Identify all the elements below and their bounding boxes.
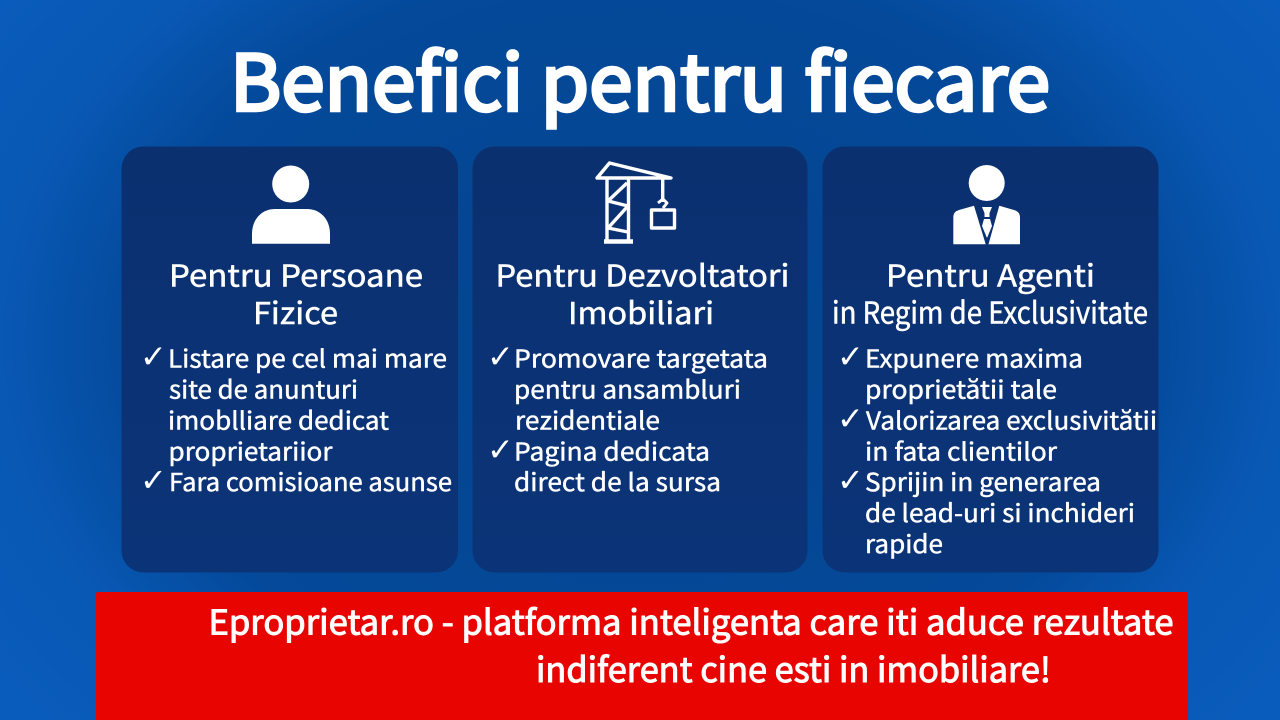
list: site de anunturi	[169, 372, 358, 406]
list: Valorizarea exclusivitătii	[866, 402, 1157, 438]
heading: Pentru Dezvoltatori	[496, 252, 790, 296]
callout text: Eproprietar.ro - platforma inteligenta care iti aduce rezultate	[208, 596, 1174, 644]
icon: agent	[953, 165, 1020, 244]
list: Pagina dedicata	[514, 434, 710, 468]
list: de lead-uri si inchideri	[865, 495, 1135, 530]
list: pentru ansambluri	[514, 372, 741, 406]
list: Expunere maxima	[865, 340, 1083, 376]
callout banner	[96, 592, 1188, 720]
heading: Pentru Agenti	[886, 252, 1095, 296]
list: ✓	[140, 338, 167, 376]
list	[837, 338, 1157, 561]
list: ✓	[487, 430, 514, 468]
list: direct de la sursa	[514, 464, 721, 499]
list: imoblliare dedicat	[168, 402, 389, 438]
list: rezidentiale	[515, 402, 660, 438]
heading: Pentru Persoane	[169, 252, 423, 296]
heading	[496, 252, 790, 333]
heading: Imobiliari	[568, 289, 714, 333]
title: Benefici pentru fiecare	[230, 22, 1050, 134]
list: ✓	[140, 461, 167, 499]
heading: Fizice	[253, 289, 338, 333]
panel: dezvoltatori	[472, 146, 808, 572]
callout text: indiferent cine esti in imobiliare!	[536, 643, 1051, 692]
list: ✓	[487, 338, 514, 376]
icon: person	[252, 166, 330, 244]
heading	[832, 252, 1148, 332]
list: Promovare targetata	[514, 340, 768, 376]
list: in fata clientilor	[865, 434, 1058, 468]
list: ✓	[837, 461, 864, 499]
icon: crane	[597, 163, 674, 242]
list	[140, 338, 452, 499]
panel: persoane fizice	[122, 146, 458, 572]
list: proprietătii tale	[865, 372, 1057, 406]
list: ✓	[837, 400, 864, 438]
callout text	[208, 596, 1174, 692]
heading: in Regim de Exclusivitate	[832, 288, 1148, 332]
list	[487, 338, 768, 499]
list: Sprijin in generarea	[865, 464, 1101, 499]
heading	[169, 252, 423, 333]
list: Listare pe cel mai mare	[168, 340, 447, 376]
list: rapide	[865, 526, 943, 561]
list: ✓	[837, 338, 864, 376]
list: proprietariior	[168, 434, 333, 468]
panel: agenti	[822, 146, 1158, 572]
list: Fara comisioane asunse	[169, 464, 452, 499]
